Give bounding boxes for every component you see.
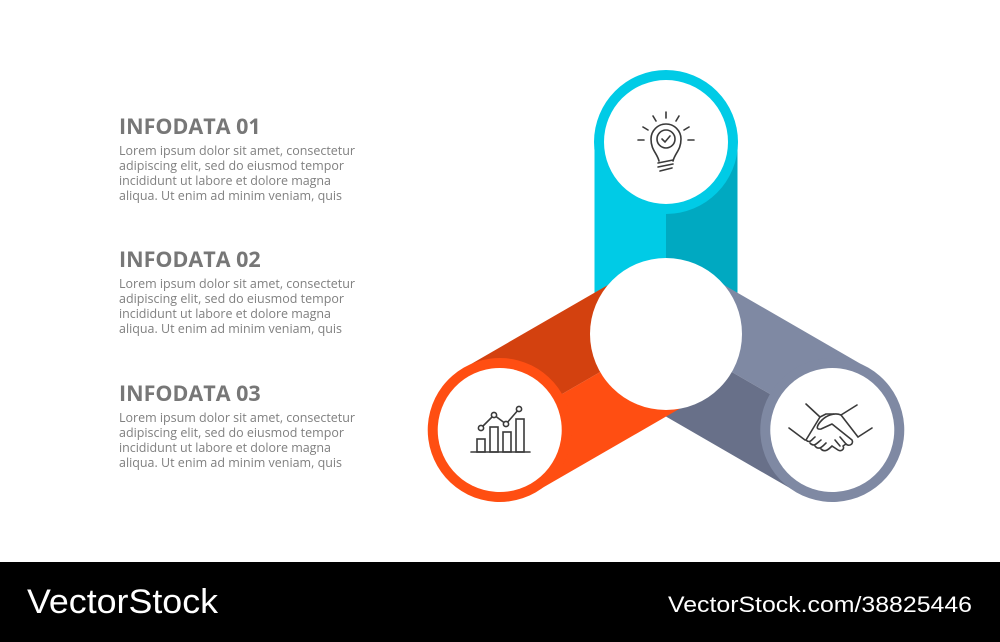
text block 02: aliqua. Ut enim ad minim veniam, quis [119,320,342,337]
diagram [401,70,931,528]
text block 02: Lorem ipsum dolor sit amet, consectetur [119,275,355,292]
text block 02: incididunt ut labore et dolore magna [119,305,331,322]
center circle [590,258,742,410]
text block 03: adipiscing elit, sed do eiusmod tempor [119,424,344,441]
icon: light bulb [638,112,694,171]
text block 02: INFODATA 02 [119,245,261,274]
footer bar [0,562,1000,642]
text block 02 [119,245,355,337]
text block 03: aliqua. Ut enim ad minim veniam, quis [119,454,342,471]
arm: gray right [630,272,931,528]
footer url: VectorStock.com/38825446 [668,592,972,617]
text block 03: Lorem ipsum dolor sit amet, consectetur [119,409,355,426]
text block 01: INFODATA 01 [119,112,261,141]
text block 01: aliqua. Ut enim ad minim veniam, quis [119,187,342,204]
text block 02: adipiscing elit, sed do eiusmod tempor [119,290,344,307]
text block 03 [119,379,355,471]
text block 01: Lorem ipsum dolor sit amet, consectetur [119,142,355,159]
icon: bar chart [471,406,530,452]
icon: handshake [789,404,872,451]
text block 01 [119,112,355,204]
footer logo: VectorStock [27,583,219,621]
arm: orange left [401,272,702,528]
text block 03: incididunt ut labore et dolore magna [119,439,331,456]
text block 01: incididunt ut labore et dolore magna [119,172,331,189]
text block 01: adipiscing elit, sed do eiusmod tempor [119,157,344,174]
text block 03: INFODATA 03 [119,379,261,408]
arm: cyan top [594,70,738,334]
